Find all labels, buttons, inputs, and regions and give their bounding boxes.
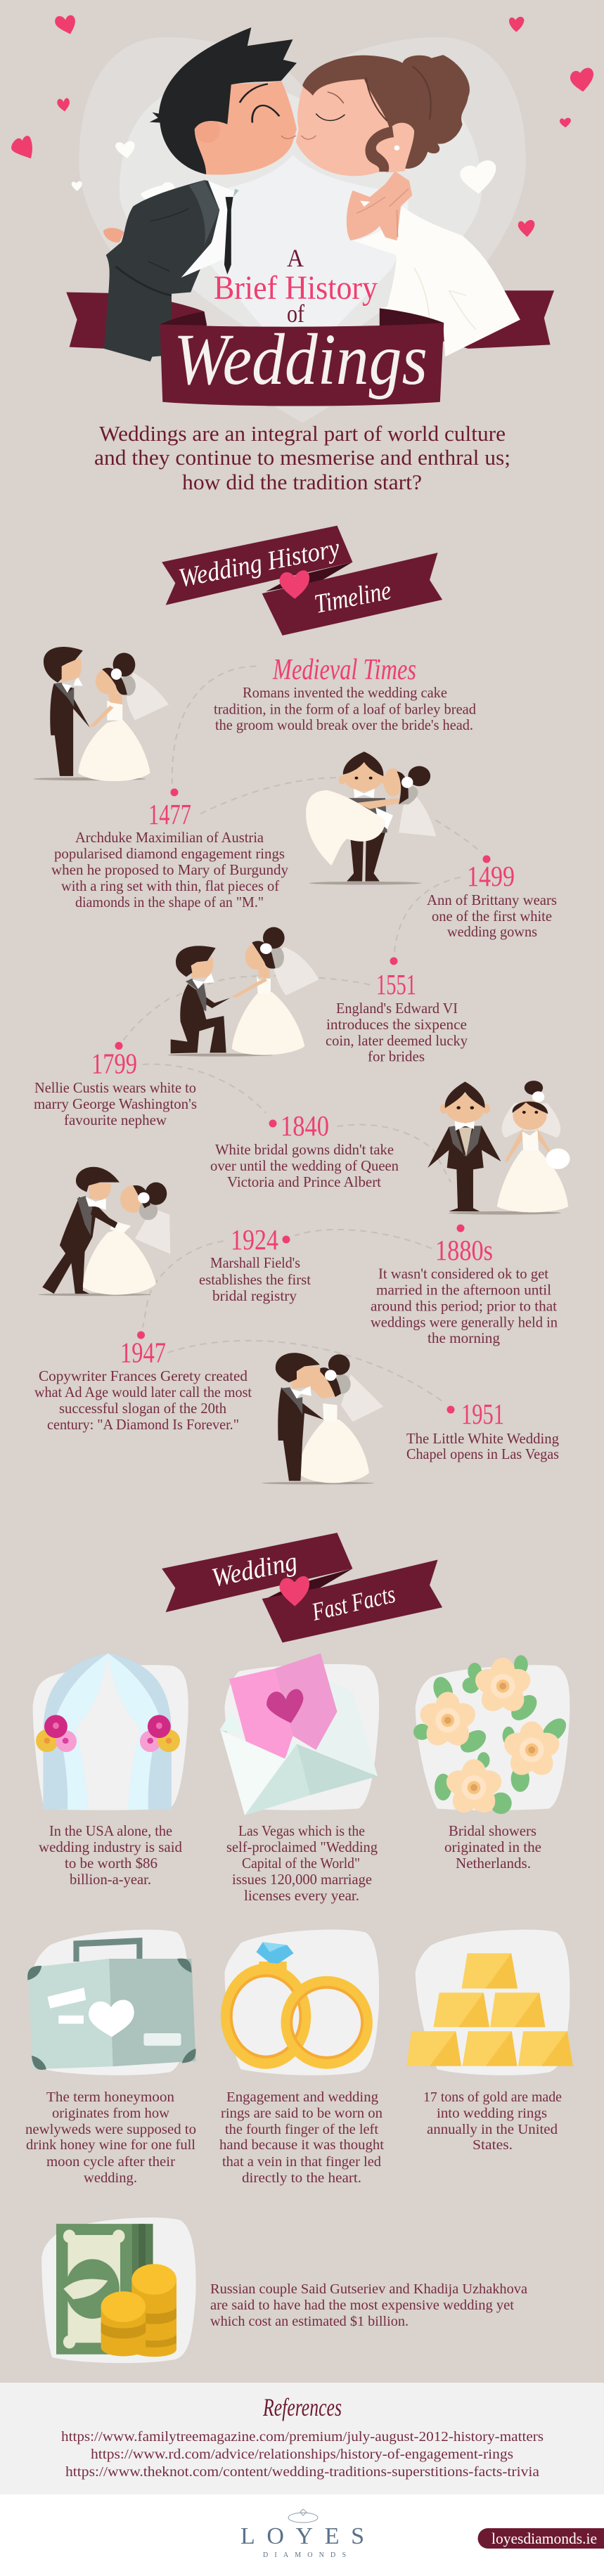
groom face details bbox=[240, 84, 296, 139]
9: 1947: Copywriter Frances Gerety created bbox=[39, 1367, 248, 1384]
logo: DIAMONDS bbox=[263, 2551, 346, 2559]
2: 1477: Archduke Maximilian of Austria bbox=[75, 829, 264, 846]
3: 1499 bbox=[427, 855, 557, 940]
fast facts heading ribbon: Fast Facts bbox=[309, 1580, 398, 1626]
5: 1799: 1799 bbox=[91, 1048, 137, 1080]
intro text: and they continue to mesmerise and enthral us; bbox=[94, 445, 510, 470]
bride head bbox=[296, 75, 414, 176]
fact: gold bbox=[423, 2089, 562, 2153]
fact: bridal showers: Bridal showers bbox=[449, 1822, 536, 1839]
reference links: https://www.rd.com/advice/relationships/history-of-engagement-rings bbox=[91, 2447, 513, 2462]
timeline heading ribbon bbox=[162, 526, 442, 636]
pale heart backdrop bbox=[79, 37, 526, 423]
neckline bbox=[360, 201, 370, 207]
dress folds bbox=[414, 268, 476, 329]
6: 1840: White bridal gowns didn't take bbox=[215, 1141, 394, 1158]
reference links: https://www.theknot.com/content/wedding-traditions-superstitions-facts-trivia bbox=[65, 2464, 539, 2480]
6: 1840: 1840 bbox=[281, 1109, 329, 1142]
9: 1947: century: "A Diamond Is Forever." bbox=[47, 1416, 239, 1433]
6: 1840 bbox=[210, 1109, 399, 1190]
8: 1880s: It wasn't considered ok to get bbox=[378, 1266, 548, 1282]
fact: engagement rings: hand because it was thought bbox=[219, 2137, 384, 2153]
suit creases bbox=[115, 208, 189, 295]
icon: wedding rings bbox=[224, 1930, 379, 2075]
7: 1924 bbox=[199, 1223, 311, 1304]
bride face details bbox=[302, 92, 345, 139]
fact: gold: States. bbox=[473, 2137, 513, 2153]
bride hair bbox=[302, 55, 470, 169]
groom hand bbox=[103, 228, 124, 243]
fact: honeymoon: drink honey wine for one full bbox=[26, 2137, 195, 2153]
fact: bridal showers: Netherlands. bbox=[456, 1855, 531, 1872]
dashed timeline connectors, lower bbox=[123, 998, 451, 1402]
fact: engagement rings: Engagement and wedding bbox=[226, 2089, 378, 2105]
2: 1477 bbox=[51, 789, 288, 910]
fact: honeymoon: wedding. bbox=[84, 2170, 137, 2186]
groom tie bbox=[224, 197, 233, 274]
couple: standing facing bbox=[33, 647, 169, 781]
groom ear bbox=[195, 117, 220, 143]
fast facts heading ribbon: Wedding bbox=[209, 1547, 300, 1593]
lapel bbox=[189, 180, 219, 245]
7: 1924: Marshall Field's bbox=[210, 1254, 300, 1271]
reference links: https://www.familytreemagazine.com/premium/july-august-2012-history-matters bbox=[61, 2429, 544, 2445]
1: medieval times: Romans invented the wedding cake bbox=[243, 684, 447, 701]
title bbox=[174, 244, 428, 400]
intro text: how did the tradition start? bbox=[182, 470, 422, 494]
fast facts heading ribbon bbox=[162, 1533, 442, 1642]
4: 1551: England's Edward VI bbox=[336, 1000, 458, 1017]
fact: honeymoon: moon cycle after their bbox=[46, 2154, 175, 2170]
fact: wedding industry: to be worth $86 bbox=[65, 1855, 158, 1872]
9: 1947 bbox=[34, 1332, 252, 1433]
couple: kissing bbox=[262, 1353, 383, 1484]
icon: suitcase bbox=[27, 1930, 196, 2075]
fact: most expensive wedding: are said to have had the most expensive wedding yet bbox=[210, 2298, 514, 2313]
2: 1477: popularised diamond engagement rings bbox=[54, 845, 285, 862]
front ribbon fold bbox=[160, 309, 444, 327]
groom head bbox=[195, 81, 297, 175]
groom suit bbox=[104, 180, 219, 361]
5: 1799: Nellie Custis wears white to bbox=[34, 1079, 196, 1096]
bride ear and neck bbox=[386, 123, 414, 173]
3: 1499: Ann of Brittany wears bbox=[427, 891, 557, 908]
logo bbox=[240, 2509, 364, 2559]
references panel bbox=[0, 2383, 604, 2494]
fact: las vegas: self-proclaimed "Wedding bbox=[226, 1838, 378, 1855]
5: 1799 bbox=[34, 1042, 197, 1128]
footer bbox=[0, 2494, 604, 2576]
2: 1477: with a ring set with thin, flat pieces of bbox=[61, 877, 279, 894]
reference links bbox=[61, 2429, 544, 2480]
hero illustration bbox=[11, 15, 593, 423]
10: 1951 bbox=[406, 1398, 559, 1462]
fact: bridal showers: originated in the bbox=[444, 1838, 541, 1855]
couple: groom kneeling bbox=[167, 927, 319, 1057]
4: 1551: coin, later deemed lucky bbox=[326, 1032, 468, 1049]
fact: most expensive wedding bbox=[210, 2281, 527, 2329]
bride dress bbox=[352, 207, 520, 356]
3: 1499: 1499 bbox=[467, 860, 515, 892]
bride curl bbox=[366, 127, 394, 172]
fact: engagement rings: directly to the heart. bbox=[242, 2170, 361, 2186]
fact: las vegas bbox=[226, 1822, 378, 1904]
1: medieval times: the groom would break over the bride's head. bbox=[215, 716, 473, 733]
8: 1880s: the morning bbox=[428, 1329, 500, 1346]
timeline heading ribbon: Timeline bbox=[312, 576, 394, 619]
fact: most expensive wedding: Russian couple Said Gutseriev and Khadija Uzhakhova bbox=[210, 2281, 527, 2297]
fact: wedding industry: billion-a-year. bbox=[70, 1871, 151, 1888]
fact: wedding industry bbox=[39, 1822, 182, 1888]
groom collar bbox=[233, 189, 239, 197]
fact: las vegas: Capital of the World" bbox=[242, 1855, 360, 1872]
fact: wedding industry: wedding industry is said bbox=[39, 1838, 182, 1855]
references heading: References bbox=[262, 2393, 342, 2421]
9: 1947: 1947 bbox=[120, 1336, 166, 1368]
logo: LOYES bbox=[240, 2523, 364, 2549]
fact: gold: 17 tons of gold are made bbox=[423, 2089, 562, 2105]
4: 1551: 1551 bbox=[376, 968, 416, 1000]
5: 1799: favourite nephew bbox=[64, 1112, 167, 1128]
icon: wedding arch bbox=[33, 1654, 188, 1810]
7: 1924: bridal registry bbox=[212, 1287, 297, 1304]
groom hair bbox=[150, 27, 297, 174]
7: 1924: establishes the first bbox=[199, 1271, 311, 1288]
fact: las vegas: issues 120,000 marriage bbox=[232, 1871, 372, 1888]
3: 1499: wedding gowns bbox=[447, 923, 537, 940]
9: 1947: what Ad Age would later call the most bbox=[34, 1384, 252, 1400]
timeline heading ribbon: Wedding History bbox=[176, 533, 342, 593]
2: 1477: when he proposed to Mary of Burgundy bbox=[51, 861, 288, 878]
8: 1880s: married in the afternoon until bbox=[376, 1281, 551, 1298]
fact: engagement rings: rings are said to be worn on bbox=[221, 2106, 383, 2121]
fact: honeymoon: newlyweds were supposed to bbox=[25, 2122, 196, 2137]
website pill: loyesdiamonds.ie bbox=[491, 2530, 597, 2547]
10: 1951: The Little White Wedding bbox=[406, 1430, 559, 1447]
fact: honeymoon: The term honeymoon bbox=[46, 2089, 174, 2105]
title: Brief History bbox=[214, 269, 378, 307]
title: of bbox=[287, 300, 304, 328]
9: 1947: successful slogan of the 20th bbox=[59, 1400, 226, 1417]
icon: love letter bbox=[219, 1654, 379, 1815]
1: medieval times: Medieval Times bbox=[272, 654, 416, 686]
title: A bbox=[287, 244, 304, 272]
back ribbon tails bbox=[66, 290, 554, 349]
8: 1880s bbox=[371, 1225, 558, 1346]
2: 1477: diamonds in the shape of an "M." bbox=[75, 894, 264, 910]
couple: dancing bbox=[38, 1167, 170, 1296]
fact: most expensive wedding: which cost an estimated $1 billion. bbox=[210, 2314, 409, 2329]
pink and white hearts bbox=[11, 15, 593, 237]
fact: wedding industry: In the USA alone, the bbox=[49, 1822, 172, 1839]
8: 1880s: weddings were generally held in bbox=[371, 1313, 558, 1330]
intro text: Weddings are an integral part of world culture bbox=[99, 421, 506, 446]
fact: bridal showers bbox=[444, 1822, 541, 1872]
3: 1499: one of the first white bbox=[432, 908, 552, 925]
8: 1880s: around this period; prior to that bbox=[371, 1298, 557, 1315]
title: Weddings bbox=[174, 319, 428, 400]
6: 1840: over until the wedding of Queen bbox=[210, 1157, 399, 1174]
10: 1951: 1951 bbox=[461, 1398, 504, 1430]
fact: honeymoon bbox=[25, 2089, 196, 2186]
7: 1924: 1924 bbox=[231, 1223, 278, 1256]
1: medieval times: tradition, in the form of a loaf of barley bread bbox=[214, 700, 476, 717]
4: 1551 bbox=[326, 958, 468, 1064]
earring bbox=[394, 146, 399, 150]
fact: engagement rings bbox=[219, 2089, 384, 2186]
groom shirt bbox=[181, 181, 236, 278]
hair strands bbox=[366, 66, 431, 121]
fact: engagement rings: that a vein in that finger led bbox=[222, 2154, 381, 2170]
hand creases bbox=[356, 189, 409, 238]
front ribbon bbox=[160, 323, 444, 406]
6: 1840: Victoria and Prince Albert bbox=[227, 1173, 381, 1190]
fact: gold: into wedding rings bbox=[437, 2106, 547, 2121]
10: 1951: Chapel opens in Las Vegas bbox=[406, 1445, 559, 1462]
couple: groom carrying bride bbox=[306, 752, 436, 884]
icon: flowers bbox=[413, 1655, 571, 1818]
couple: front facing bbox=[428, 1081, 570, 1215]
8: 1880s: 1880s bbox=[435, 1234, 493, 1266]
5: 1799: marry George Washington's bbox=[34, 1095, 197, 1112]
fact: las vegas: licenses every year. bbox=[244, 1887, 359, 1904]
intro text bbox=[94, 421, 510, 494]
bride arms and hands bbox=[347, 171, 412, 240]
fact: honeymoon: originates from how bbox=[52, 2106, 169, 2121]
icon: cash and coins bbox=[41, 2217, 196, 2363]
fact: gold: annually in the United bbox=[427, 2122, 558, 2137]
1: medieval times bbox=[214, 654, 476, 733]
fact: las vegas: Las Vegas which is the bbox=[238, 1822, 365, 1839]
4: 1551: for brides bbox=[368, 1048, 425, 1064]
4: 1551: introduces the sixpence bbox=[326, 1016, 467, 1033]
dashed timeline connectors, upper bbox=[172, 666, 482, 998]
2: 1477: 1477 bbox=[148, 798, 191, 830]
icon: gold bars bbox=[406, 1930, 573, 2075]
fact: engagement rings: the fourth finger of the left bbox=[225, 2122, 378, 2137]
